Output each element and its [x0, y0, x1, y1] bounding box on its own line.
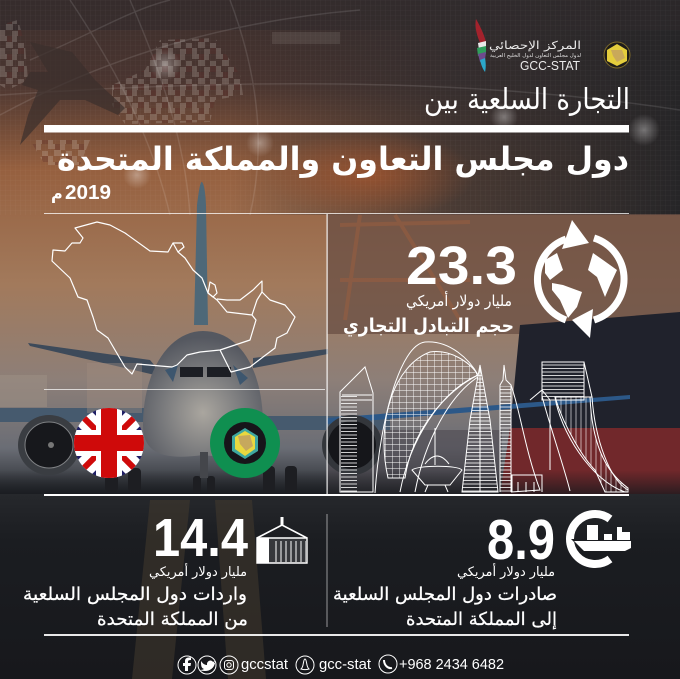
globe lines	[0, 0, 680, 215]
top-left flying plane silhouette	[20, 42, 125, 145]
social footer: gcc-stat	[319, 657, 371, 673]
world map squares	[112, 38, 243, 124]
stat: GCC imports: مليار دولار أمريكي	[149, 563, 247, 580]
stat: trade volume: مليار دولار أمريكي	[406, 291, 512, 311]
logo: GCC-STAT	[476, 19, 582, 73]
map: GCC countries outline	[52, 222, 295, 374]
stat: trade volume: حجم التبادل التجاري	[343, 315, 514, 338]
stat: trade volume: 23.3	[406, 236, 517, 296]
logo: GCC-STAT: GCC-STAT	[520, 58, 580, 73]
stat: trade volume	[343, 236, 517, 338]
title: دول مجلس التعاون والمملكة المتحدة	[57, 140, 629, 178]
ship hull	[510, 312, 680, 430]
flag: United Kingdom	[74, 408, 144, 478]
stat: GCC exports: 8.9	[487, 508, 555, 572]
social footer	[178, 655, 504, 674]
stat: GCC exports	[333, 508, 557, 630]
icon: cargo ship in ring	[570, 514, 633, 564]
skyline illustration	[340, 342, 628, 493]
logo: GCC emblem	[604, 42, 630, 68]
title bar	[44, 125, 629, 132]
social footer: gccstat	[241, 657, 288, 673]
stat: GCC imports: واردات دول المجلس السلعية	[23, 584, 247, 605]
logo: GCC-STAT: لدول مجلس التعاون لدول الخليج العربية	[490, 53, 582, 59]
logo: GCC-STAT: المركز الإحصائي	[489, 39, 581, 52]
stat: GCC imports: 14.4	[153, 508, 248, 568]
runway markings	[132, 500, 266, 679]
social footer: +968 2434 6482	[399, 657, 504, 673]
stat: GCC imports: من المملكة المتحدة	[97, 609, 248, 630]
flag: GCC emblem on green	[210, 408, 280, 478]
subtitle: merchandise trade between: التجارة السلعية بين	[424, 82, 630, 116]
icon: globe with circular arrows	[537, 220, 624, 338]
stat: GCC exports: مليار دولار أمريكي	[457, 563, 555, 580]
stat: GCC exports: صادرات دول المجلس السلعية	[333, 584, 557, 605]
stat: GCC imports	[23, 508, 248, 630]
airplane photo	[0, 182, 630, 494]
grid lines	[44, 213, 629, 636]
year: 2019	[65, 182, 111, 204]
stat: GCC exports: إلى المملكة المتحدة	[406, 609, 557, 630]
icon: shipping container on crane	[257, 517, 307, 563]
year: م	[51, 184, 63, 203]
